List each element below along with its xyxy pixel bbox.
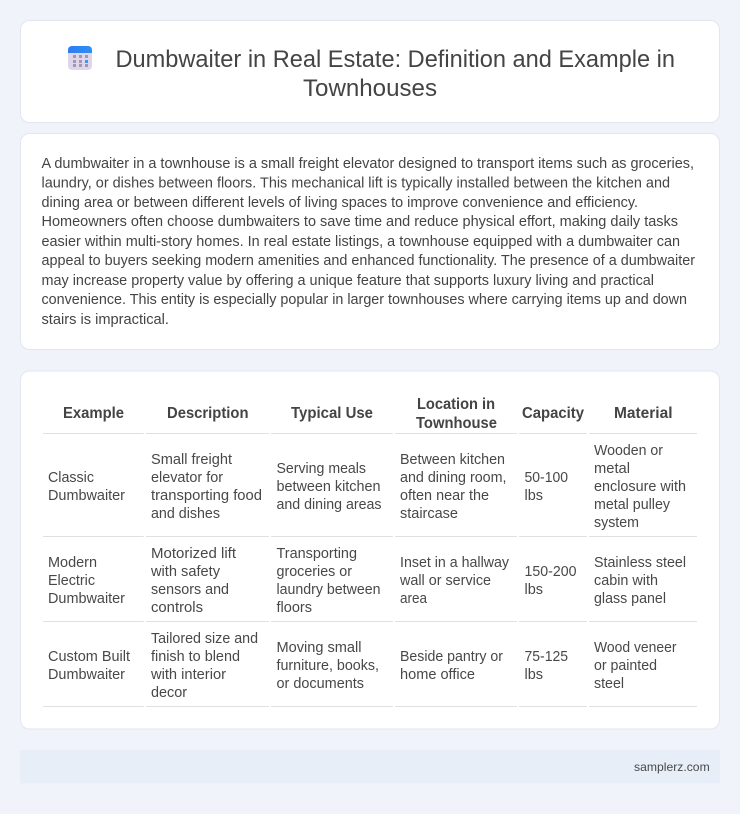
table row: modern electric dumbwaiter: sensors and — [151, 582, 229, 598]
table row: custom built dumbwaiter: with interior — [150, 667, 226, 683]
footer: samplerz.com — [634, 760, 710, 774]
table row: custom built dumbwaiter: Tailored size and — [151, 631, 258, 647]
table row: custom built dumbwaiter: Custom Built — [48, 649, 130, 665]
table row: classic dumbwaiter: 50-100 — [524, 470, 568, 486]
table row: classic dumbwaiter: metal pulley — [594, 497, 671, 513]
panel: description — [20, 134, 720, 350]
table row: classic dumbwaiter: system — [594, 515, 639, 531]
table row: custom built dumbwaiter: finish to blend — [151, 649, 240, 665]
table header row: Typical Use — [291, 405, 373, 422]
panel: comparison table — [20, 371, 720, 729]
table row: custom built dumbwaiter: Dumbwaiter — [48, 667, 125, 683]
table row: custom built dumbwaiter: lbs — [524, 667, 543, 683]
table row: modern electric dumbwaiter: laundry between — [276, 582, 380, 598]
table row: classic dumbwaiter — [48, 443, 686, 531]
table row: modern electric dumbwaiter: area — [400, 591, 427, 607]
table row: modern electric dumbwaiter: Inset in a hallway — [400, 555, 510, 571]
table row: modern electric dumbwaiter: wall or service — [399, 573, 491, 589]
table header row: Description — [167, 405, 248, 422]
table row: custom built dumbwaiter: or painted — [594, 658, 657, 674]
title: Dumbwaiter in Real Estate: Definition and Example in — [116, 46, 675, 73]
table header row: Capacity — [522, 405, 584, 422]
table row: classic dumbwaiter: Wooden or — [594, 443, 663, 459]
table row: modern electric dumbwaiter: controls — [151, 600, 203, 616]
table row: custom built dumbwaiter: home office — [400, 667, 475, 683]
icon: calendar — [68, 46, 92, 70]
table row: modern electric dumbwaiter: Modern — [48, 555, 97, 571]
table row: modern electric dumbwaiter — [48, 546, 686, 616]
table row: classic dumbwaiter: and dining areas — [276, 497, 382, 513]
text block: description paragraph: may increase property value by offering a unique feature that supports luxury living and practical — [42, 273, 654, 289]
text block: description paragraph: A dumbwaiter in a townhouse is a small freight elevator designed to transport items such as groceries, — [42, 156, 694, 172]
table row: classic dumbwaiter: lbs — [524, 488, 543, 504]
table header row: Material — [614, 405, 672, 422]
table row: classic dumbwaiter: elevator for — [151, 470, 223, 486]
text block: description paragraph: Homeowners often choose dumbwaiters to save time and reduce physical effort, making daily tasks — [42, 214, 678, 230]
table header row: Townhouse — [416, 415, 497, 432]
panel: header — [20, 20, 720, 122]
table row: classic dumbwaiter: Between kitchen — [400, 452, 505, 468]
text block: description paragraph: easier within multi-story homes. In real estate listings, a townhouse equipped with a dumbwaiter can — [42, 234, 680, 250]
table row: custom built dumbwaiter: or documents — [276, 676, 364, 692]
table row: modern electric dumbwaiter: Stainless steel — [594, 555, 686, 571]
table row: classic dumbwaiter: Serving meals — [276, 461, 366, 477]
text block: description paragraph: appeal to buyers seeking modern amenities and enhanced functionality. The presence of a dumbwaiter — [42, 253, 695, 269]
table row: modern electric dumbwaiter: groceries or — [276, 564, 352, 580]
title — [116, 46, 675, 102]
footer — [20, 750, 720, 784]
table row: modern electric dumbwaiter: 150-200 — [524, 564, 576, 580]
table row: modern electric dumbwaiter: glass panel — [594, 591, 666, 607]
table row: custom built dumbwaiter: Moving small — [276, 640, 362, 656]
table row: classic dumbwaiter: metal — [594, 461, 630, 477]
table row: classic dumbwaiter: Classic — [48, 470, 94, 486]
table row: classic dumbwaiter: enclosure with — [594, 479, 686, 495]
table row: modern electric dumbwaiter: lbs — [524, 582, 543, 598]
table row: modern electric dumbwaiter: with safety — [150, 564, 221, 580]
table row: custom built dumbwaiter: 75-125 — [524, 649, 568, 665]
table row: custom built dumbwaiter: Wood veneer — [594, 640, 677, 656]
table row: classic dumbwaiter: and dining room, — [400, 470, 506, 486]
table row: custom built dumbwaiter: steel — [594, 676, 624, 692]
table header row — [63, 396, 672, 432]
table row: modern electric dumbwaiter: Transporting — [276, 546, 357, 562]
table row: modern electric dumbwaiter: Dumbwaiter — [48, 591, 125, 607]
table header row: Example — [63, 405, 124, 422]
table row: classic dumbwaiter: Dumbwaiter — [48, 488, 125, 504]
table row: classic dumbwaiter: and dishes — [151, 506, 220, 522]
title: Townhouses — [303, 75, 437, 102]
table header row: Location in — [417, 396, 495, 413]
table row: custom built dumbwaiter: Beside pantry or — [400, 649, 503, 665]
table row: classic dumbwaiter: between kitchen — [276, 479, 380, 495]
table row: classic dumbwaiter: Small freight — [151, 452, 232, 468]
table row: classic dumbwaiter: transporting food — [151, 488, 262, 504]
table row: modern electric dumbwaiter: floors — [276, 600, 312, 616]
text block: description paragraph: stairs is impractical. — [42, 312, 169, 328]
table row: classic dumbwaiter: often near the — [400, 488, 489, 504]
table row: custom built dumbwaiter — [48, 631, 677, 701]
text block: description paragraph: dining area or between different levels of living spaces to improve convenience and efficiency. — [42, 195, 638, 211]
table row: modern electric dumbwaiter: Electric — [48, 573, 95, 589]
table row: custom built dumbwaiter: decor — [151, 685, 187, 701]
table row: modern electric dumbwaiter: Motorized lift — [151, 546, 236, 562]
table row: modern electric dumbwaiter: cabin with — [594, 573, 658, 589]
table row: custom built dumbwaiter: furniture, books, — [276, 658, 379, 674]
text block: description paragraph: laundry, or dishes between floors. This mechanical lift is typically installed between the kitchen and — [42, 176, 670, 192]
text block: description paragraph: convenience. This entity is especially popular in larger townhouses where carrying items up and down — [42, 292, 687, 308]
table row: classic dumbwaiter: staircase — [400, 506, 458, 522]
text block: description paragraph — [42, 156, 695, 328]
